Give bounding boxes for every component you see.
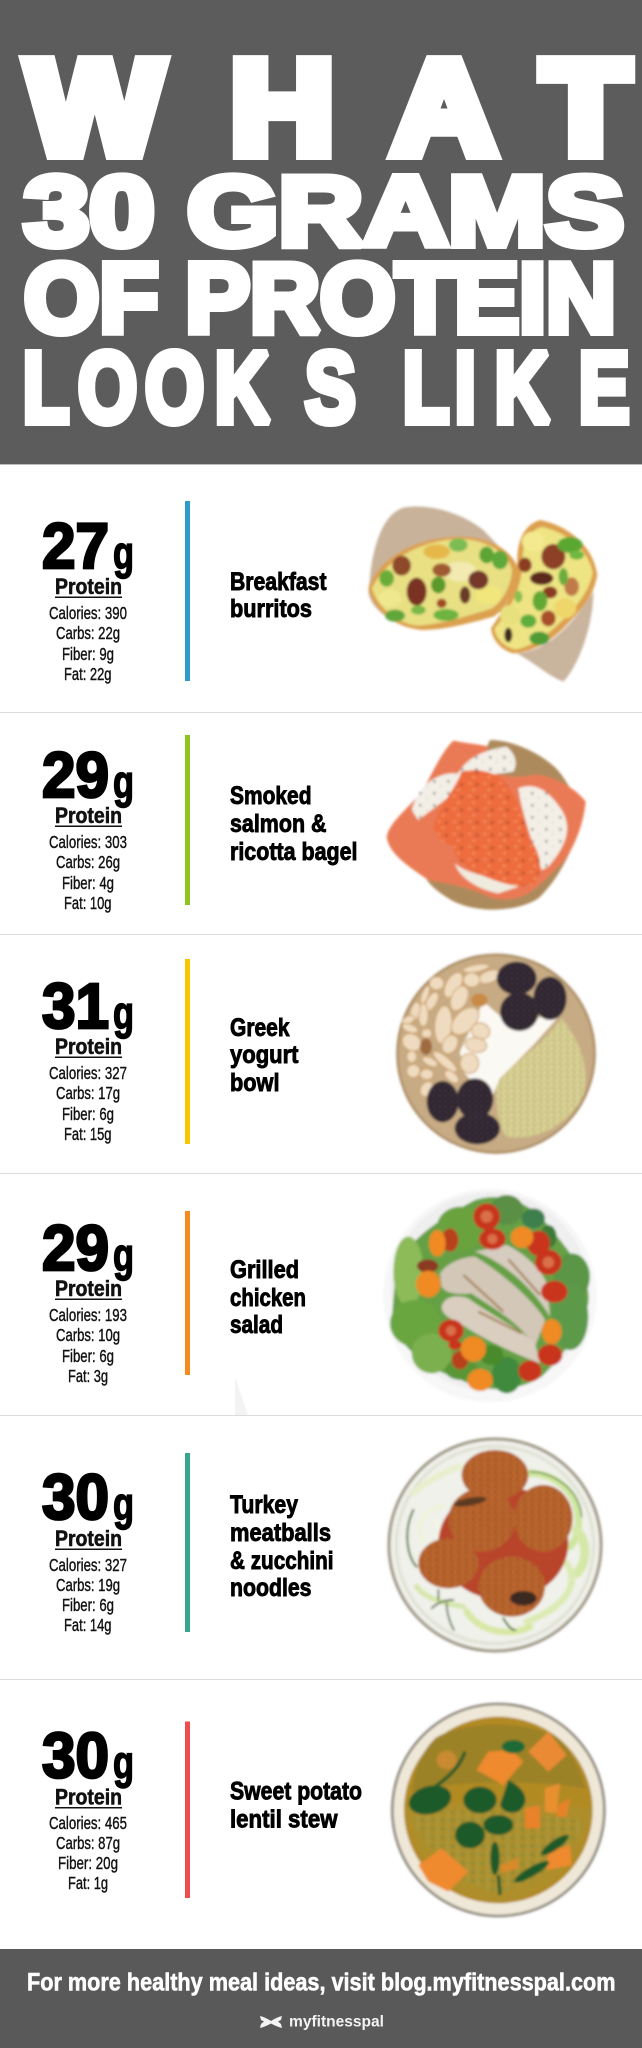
nutrition stats: Fat: 14g	[64, 1615, 112, 1635]
meal name: Greek	[230, 1014, 290, 1042]
nutrition stats: Carbs: 19g	[56, 1575, 120, 1595]
meal name	[230, 568, 327, 623]
nutrition stats	[49, 1555, 127, 1635]
food photo: meatballs	[389, 1439, 601, 1651]
nutrition stats	[49, 603, 127, 684]
nutrition stats: Fat: 15g	[64, 1124, 112, 1144]
protein amount: 31	[42, 970, 109, 1042]
meal name: Turkey	[230, 1491, 298, 1519]
protein amount: 29	[42, 1212, 109, 1284]
panel: title header	[0, 0, 642, 465]
nutrition stats: Fiber: 6g	[62, 1346, 114, 1366]
meal name: ricotta bagel	[230, 838, 358, 866]
title line: OF PROTEIN: OF PROTEIN	[24, 243, 616, 353]
nutrition stats: Carbs: 17g	[56, 1083, 120, 1103]
food photo: burritos	[368, 507, 597, 682]
food photo: lentil stew	[392, 1704, 604, 1916]
icon: brand logo	[260, 2016, 282, 2028]
nutrition stats: Carbs: 87g	[56, 1833, 120, 1853]
meal name	[230, 1778, 362, 1834]
protein unit: g	[113, 987, 134, 1039]
meal name	[230, 1014, 299, 1097]
nutrition stats	[49, 1063, 127, 1144]
meal name: Sweet potato	[230, 1778, 362, 1806]
panel: greek yogurt bowl	[42, 955, 595, 1153]
nutrition stats: Fat: 22g	[64, 664, 112, 684]
meal name	[230, 782, 358, 866]
title line: LOOKS LIKE: LOOKS LIKE	[23, 332, 629, 443]
meal name: salmon &	[230, 810, 326, 838]
nutrition stats: Calories: 390	[49, 603, 127, 623]
panel: footer	[0, 1949, 642, 2048]
meal name: Breakfast	[230, 568, 327, 596]
protein label: Protein	[55, 1276, 122, 1301]
meal name	[230, 1491, 334, 1602]
meal name: burritos	[230, 595, 312, 623]
nutrition stats: Fat: 3g	[68, 1366, 108, 1386]
meal name: bowl	[230, 1069, 280, 1097]
nutrition stats	[49, 832, 127, 913]
meal name: meatballs	[230, 1519, 331, 1547]
nutrition stats: Calories: 327	[49, 1063, 127, 1083]
protein unit: g	[113, 527, 134, 579]
nutrition stats: Fat: 10g	[64, 893, 112, 913]
protein amount: 29	[42, 739, 109, 811]
meal name: Grilled	[230, 1256, 299, 1284]
colour bar	[185, 959, 190, 1144]
colour bar	[185, 1453, 190, 1632]
brand name: myfitnesspal	[289, 2014, 384, 2031]
protein label: Protein	[55, 1784, 122, 1810]
panel: turkey meatballs and zucchini noodles	[42, 1439, 601, 1651]
protein amount: 30	[42, 1461, 109, 1533]
colour bar	[185, 735, 190, 905]
colour bar	[185, 1211, 190, 1375]
panel: grilled chicken salad	[42, 1189, 597, 1402]
nutrition stats: Carbs: 26g	[56, 852, 120, 872]
protein label: Protein	[55, 1526, 122, 1551]
nutrition stats: Fiber: 20g	[58, 1853, 118, 1873]
nutrition stats: Fiber: 4g	[62, 873, 114, 893]
meal name: Smoked	[230, 782, 312, 810]
nutrition stats: Calories: 327	[49, 1555, 127, 1575]
nutrition stats: Fiber: 6g	[62, 1104, 114, 1124]
panel: smoked salmon and ricotta bagel	[42, 735, 586, 913]
protein unit: g	[113, 1736, 134, 1788]
nutrition stats	[49, 1813, 127, 1893]
protein unit: g	[113, 756, 134, 808]
meal name	[230, 1256, 306, 1339]
meal name: & zucchini	[230, 1547, 334, 1575]
panel: sweet potato lentil stew	[42, 1704, 604, 1916]
food photo: salmon bagel	[387, 740, 586, 910]
nutrition stats: Carbs: 22g	[56, 623, 120, 643]
protein amount: 30	[42, 1720, 109, 1792]
protein label: Protein	[55, 574, 122, 599]
colour bar	[185, 1722, 190, 1898]
protein label: Protein	[55, 803, 122, 828]
protein unit: g	[113, 1478, 134, 1530]
nutrition stats: Calories: 193	[49, 1305, 127, 1325]
protein label: Protein	[55, 1034, 122, 1059]
meal name: lentil stew	[230, 1806, 338, 1834]
protein unit: g	[113, 1229, 134, 1281]
nutrition stats	[49, 1305, 127, 1386]
title line: WHAT: WHAT	[28, 35, 629, 182]
nutrition stats: Calories: 303	[49, 832, 127, 852]
colour bar	[185, 501, 190, 681]
protein amount: 27	[42, 510, 109, 582]
nutrition stats: Calories: 465	[49, 1813, 127, 1833]
food photo: chicken salad	[383, 1189, 597, 1402]
small grey wedge artifact	[235, 1377, 248, 1415]
panel: breakfast burritos	[42, 501, 597, 684]
meal name: noodles	[230, 1574, 312, 1602]
food photo: yogurt bowl	[397, 955, 595, 1153]
meal name: salad	[230, 1311, 283, 1339]
meal name: chicken	[230, 1284, 306, 1312]
nutrition stats: Carbs: 10g	[56, 1325, 120, 1345]
nutrition stats: Fiber: 6g	[62, 1595, 114, 1615]
nutrition stats: Fiber: 9g	[62, 644, 114, 664]
title line: 30 GRAMS: 30 GRAMS	[24, 156, 624, 266]
nutrition stats: Fat: 1g	[68, 1873, 108, 1893]
meal name: yogurt	[230, 1041, 299, 1069]
